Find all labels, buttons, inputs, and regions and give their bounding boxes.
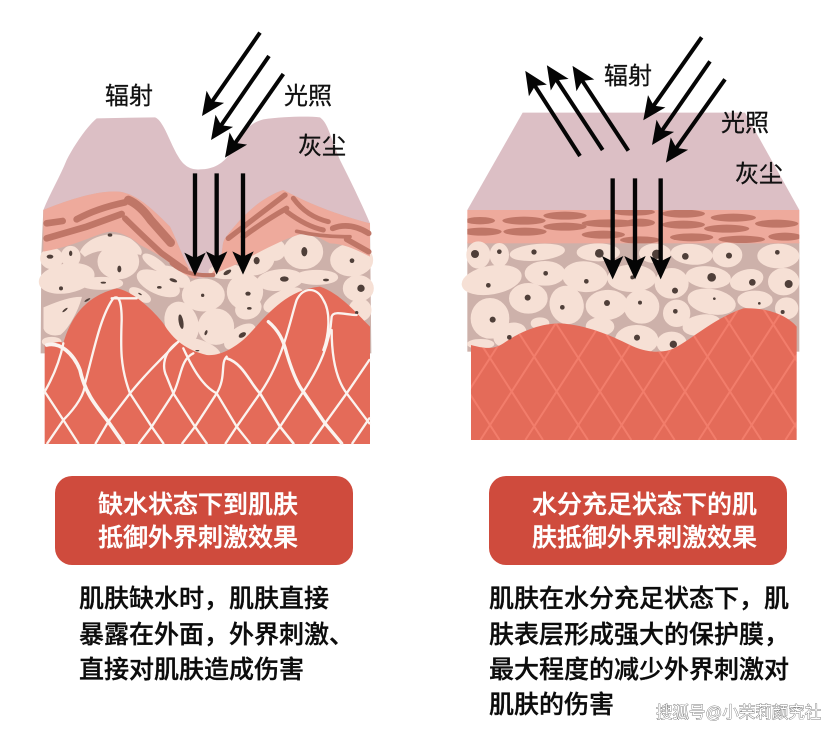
cell nuclei [47, 233, 365, 351]
label: light (left): 光照 [284, 83, 332, 110]
arrows: incoming rays [207, 33, 283, 150]
heading box: hydrated: 水分充足状态下的肌 [532, 491, 757, 519]
epidermis band [467, 210, 799, 243]
skin cells [368, 242, 836, 440]
dermis [45, 287, 370, 444]
arrows: incoming rays [649, 37, 725, 155]
text block: dehydrated description [79, 585, 354, 684]
epidermis stripes [47, 195, 369, 275]
cell layer background [467, 242, 799, 352]
text block: dehydrated description: 肌肤缺水时，肌肤直接 [79, 585, 329, 613]
label: dust (left): 灰尘 [298, 133, 346, 160]
panel: hydrated skin diagram [462, 36, 800, 440]
text block: hydrated description: 肤表层形成强大的保护膜， [489, 621, 789, 649]
skin cells [38, 236, 372, 361]
text block: dehydrated description: 暴露在外面，外界刺激、 [79, 621, 354, 649]
text block: hydrated description [489, 585, 789, 719]
healthy lattice [471, 310, 797, 440]
epidermis band [43, 190, 370, 278]
label: light (right): 光照 [721, 110, 769, 137]
arrows: penetrating into skin [613, 178, 661, 270]
heading box: dehydrated [55, 476, 353, 565]
text block: dehydrated description: 直接对肌肤造成伤害 [79, 656, 304, 684]
dust layer [43, 117, 370, 287]
text block: hydrated description: 肌肤在水分充足状态下，肌 [489, 585, 789, 613]
cell nuclei [471, 249, 793, 348]
watermark: 搜狐号@小荣莉颜究社 [656, 703, 821, 722]
label: dust (right): 灰尘 [735, 161, 783, 188]
panel: dehydrated skin diagram [38, 33, 372, 444]
heading box: hydrated [489, 476, 787, 565]
arrows: penetrating into skin [195, 173, 243, 267]
text block: hydrated description: 最大程度的减少外界刺激对 [489, 656, 789, 684]
white collagen lattice, broken [45, 290, 369, 443]
arrows: reflected rays [530, 73, 628, 156]
heading box: dehydrated: 抵御外界刺激效果 [98, 524, 298, 552]
dust layer [467, 113, 799, 210]
label: radiation (left): 辐射 [105, 83, 153, 110]
cell layer background [41, 190, 371, 353]
text block: hydrated description: 肌肤的伤害 [489, 691, 614, 719]
dermis [471, 308, 797, 440]
epidermis ovals [462, 208, 802, 244]
heading box: dehydrated: 缺水状态下到肌肤 [98, 491, 298, 519]
heading box: hydrated: 肤抵御外界刺激效果 [532, 524, 757, 552]
label: radiation (right): 辐射 [604, 63, 652, 90]
